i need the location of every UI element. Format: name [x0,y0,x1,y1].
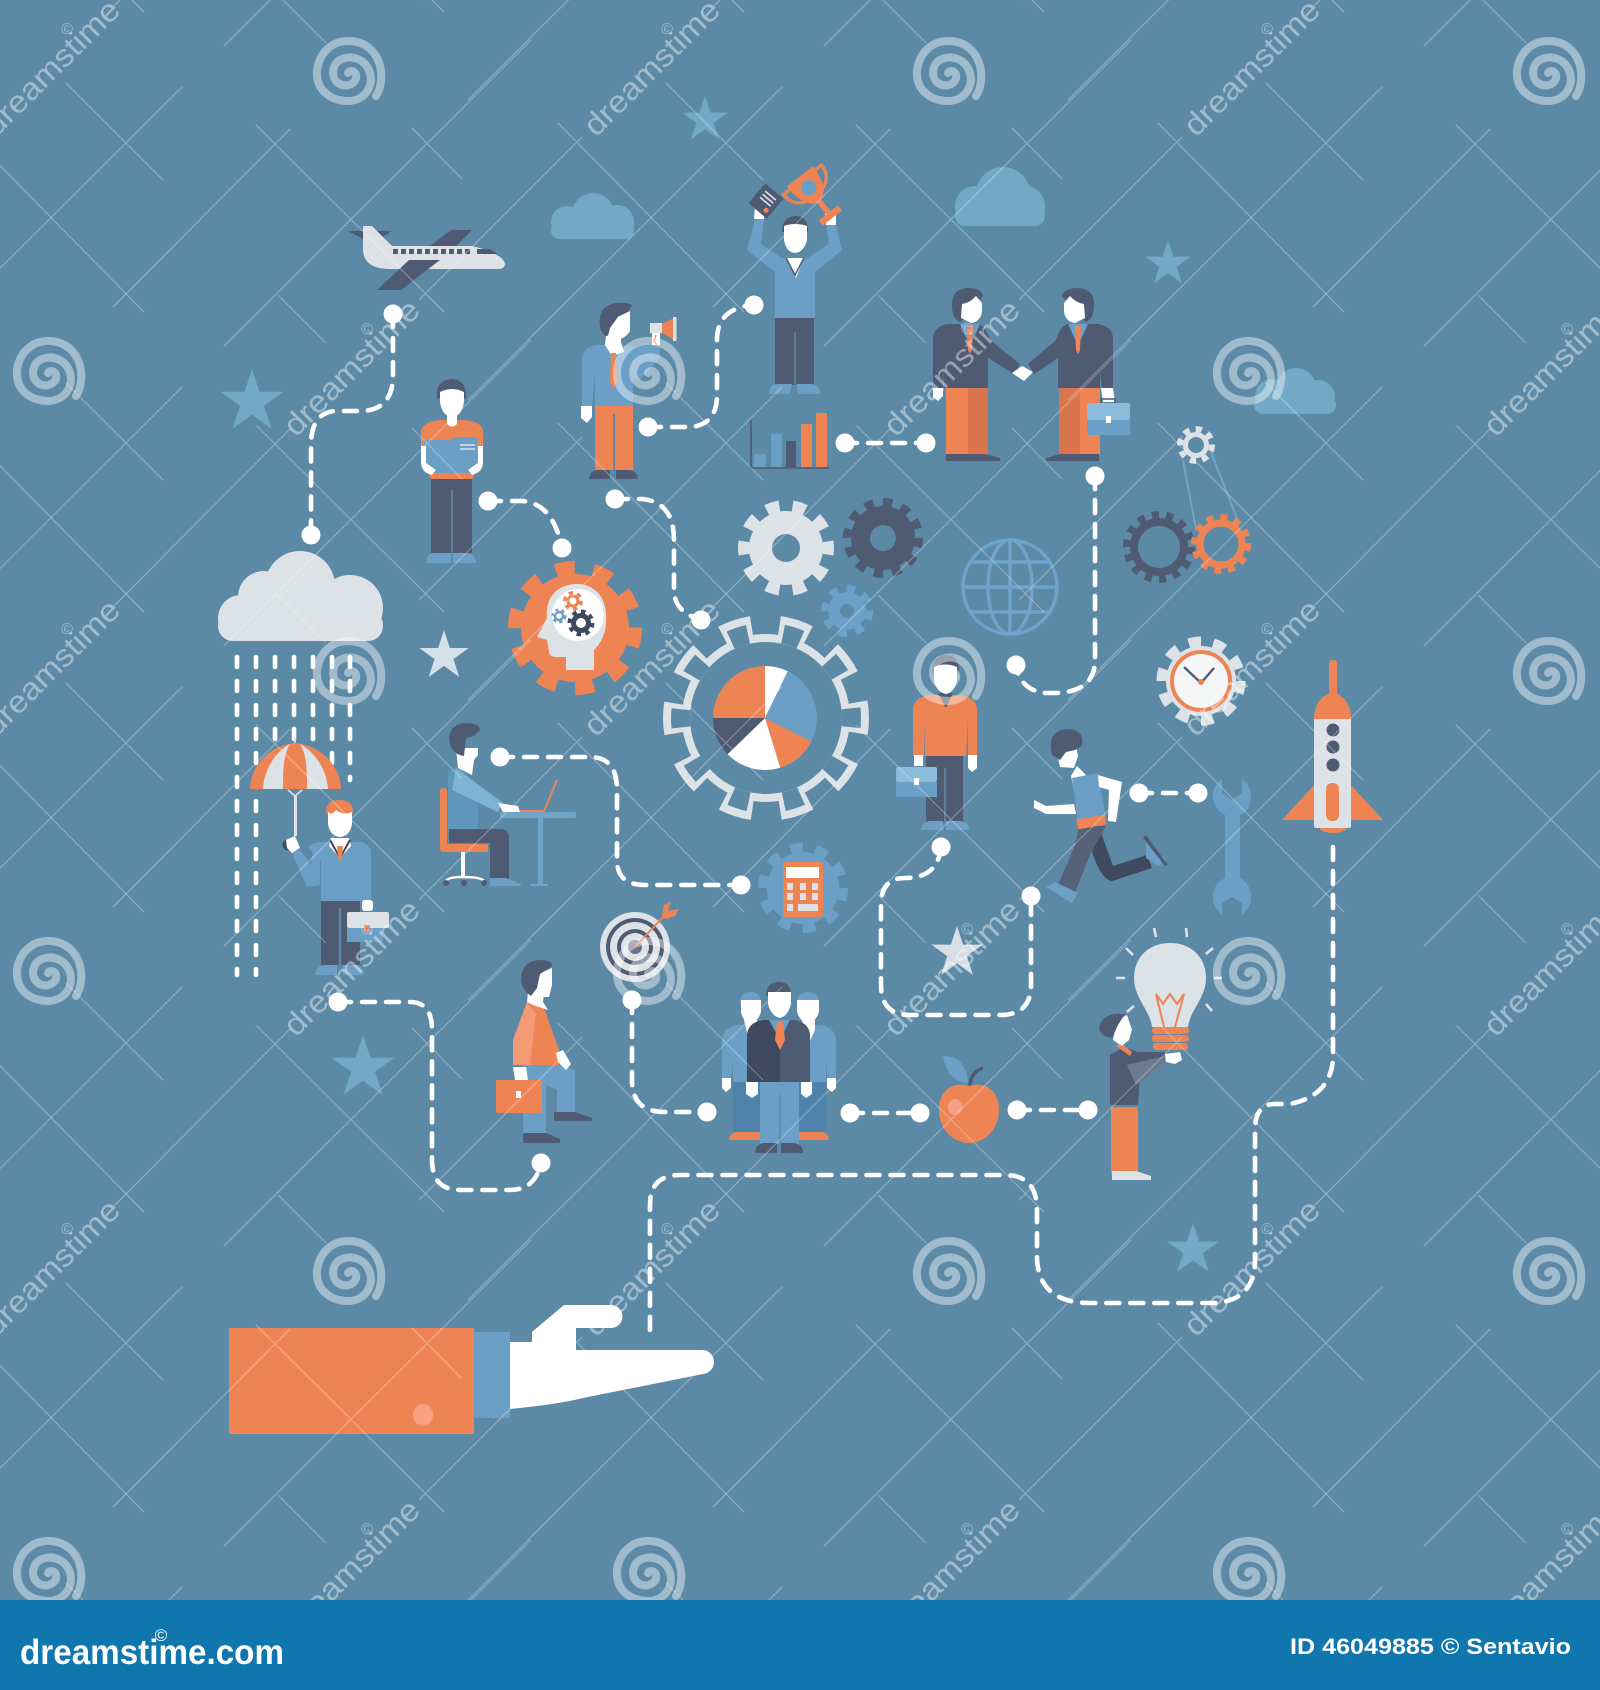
icon: clock gear [1163,643,1239,719]
path: megaphone man to main gear [606,490,710,630]
briefcase [496,1080,542,1113]
icon: airplane [348,226,505,290]
orange gear [1195,518,1247,570]
icon: trophy [781,161,851,233]
left man [722,992,762,1140]
icon: belt gears [1127,429,1247,579]
small gray gear [1180,429,1212,461]
icon: certificate [748,183,784,219]
watermark copyright marks: © [961,1521,973,1538]
stars [221,96,1219,1272]
left man [933,288,1020,461]
path: chart to handshake [836,434,936,452]
right man [1028,288,1130,461]
footer bar [0,1600,1600,1690]
right man [796,992,836,1140]
briefcase [896,767,937,797]
briefcase [1087,399,1130,435]
icon: wrench [1213,779,1251,915]
people: team [722,982,836,1153]
desk [500,812,576,886]
path: handshake to globe [1006,466,1104,693]
watermark copyright marks: © [961,921,973,938]
icon: rain cloud [218,551,383,975]
watermark text: dreamstime [576,1192,727,1343]
watermark copyright marks: © [361,321,373,338]
person: desk worker [440,723,576,886]
path: megaphone man to trophy man [638,296,764,436]
gears in head [553,593,592,634]
watermark text: dreamstime [576,0,727,143]
people: handshake [933,288,1130,461]
star: left [221,369,283,429]
person: man holding lightbulb [1099,928,1222,1180]
footer logo: dreamstime.com [20,1633,284,1672]
footer logo: © [155,1626,168,1645]
path: target to team [622,990,716,1122]
icon: megaphone [650,317,676,345]
button [413,1404,433,1426]
icon: dark gear [848,502,918,574]
watermark copyright marks: © [361,921,373,938]
watermark copyright marks: © [961,321,973,338]
person: orange sweater man [896,655,977,830]
watermark text: dreamstime [1176,592,1327,743]
pie chart [713,666,817,770]
clasped hands [1012,366,1033,381]
blue folder [424,437,477,473]
watermark text: dreamstime [876,892,1027,1043]
calculator [783,862,823,917]
watermark copyright marks: © [661,21,673,38]
laptop [519,780,557,811]
icon: globe [963,540,1057,634]
watermark copyright marks: © [1261,1221,1273,1238]
watermark copyright marks: © [1561,321,1573,338]
cloud: right [1254,368,1336,414]
person: man with megaphone [581,303,676,479]
watermark copyright marks: © [1261,21,1273,38]
watermark text: dreamstime [276,292,427,443]
path: tablet man to head gear [478,492,572,558]
watermark copyright marks: © [61,1221,73,1238]
star: light centre left [419,630,469,677]
watermark copyright marks: © [361,1521,373,1538]
briefcase [347,912,389,942]
cloud: top right [955,167,1045,226]
icon: rocket [1282,660,1383,833]
path: apple to bulb man [1008,1100,1098,1120]
watermark copyright marks: © [1561,1521,1573,1538]
cloud: top left [551,193,634,239]
star: top [682,96,728,139]
watermark copyright marks: © [661,1221,673,1238]
person: runner [1034,729,1168,903]
watermark text: dreamstime [276,1492,427,1643]
cuff [474,1332,510,1418]
hand with sleeve [229,1305,714,1434]
watermark text: dreamstime [876,292,1027,443]
icon: head with gears [516,569,634,687]
centre man [746,982,812,1153]
icon: calculator gear [764,849,842,927]
path: plane to cloud [302,304,402,544]
decorative clouds [551,167,1336,414]
light rays [1116,928,1222,1012]
cloud [218,551,383,641]
dashed connector paths [302,296,1333,1332]
path: orange man to runner [881,838,1040,1015]
watermark copyright marks: © [661,621,673,638]
hand with umbrella handle [282,836,300,853]
watermark copyright marks: © [61,621,73,638]
sleeve [229,1328,474,1434]
path: umbrella man to walking man [328,992,550,1190]
path: runner to wrench [1130,784,1208,802]
path: desk man to calculator [490,748,750,894]
rain [237,657,350,975]
watermark text: dreamstime [1176,1192,1327,1343]
watermark copyright marks: © [61,21,73,38]
chair [440,788,488,886]
watermark copyright marks: © [1261,621,1273,638]
hand [510,1305,714,1409]
person: man with tablet [421,379,483,563]
main gear with pie chart [674,626,858,810]
footer credit: ID 46049885 © Sentavio [1290,1634,1571,1659]
icon: gray gear [744,506,828,590]
star: lower left [332,1035,394,1095]
gear outline [674,626,858,810]
lightbulb [1116,928,1222,1050]
dark gear [1127,515,1191,579]
icon: target [600,902,679,982]
watermark text: dreamstime [1176,0,1327,143]
bar chart [751,413,829,468]
person: man with trophy [747,161,851,394]
watermark text: dreamstime [276,892,427,1043]
person: umbrella man [250,737,389,975]
watermark copyright marks: © [1561,921,1573,938]
path: rocket to hand [650,847,1333,1332]
person: walking man with briefcase [496,960,592,1143]
star: light centre right [931,926,983,975]
icon: apple [939,1056,999,1143]
arrow [635,902,679,947]
icon: small blue gear [825,589,869,633]
watermark text: dreamstime [876,1492,1027,1643]
star: top right [1145,240,1191,283]
path: team to apple [840,1104,930,1122]
umbrella [250,737,341,836]
star: lower right [1167,1223,1219,1272]
watermark text: dreamstime [576,592,727,743]
